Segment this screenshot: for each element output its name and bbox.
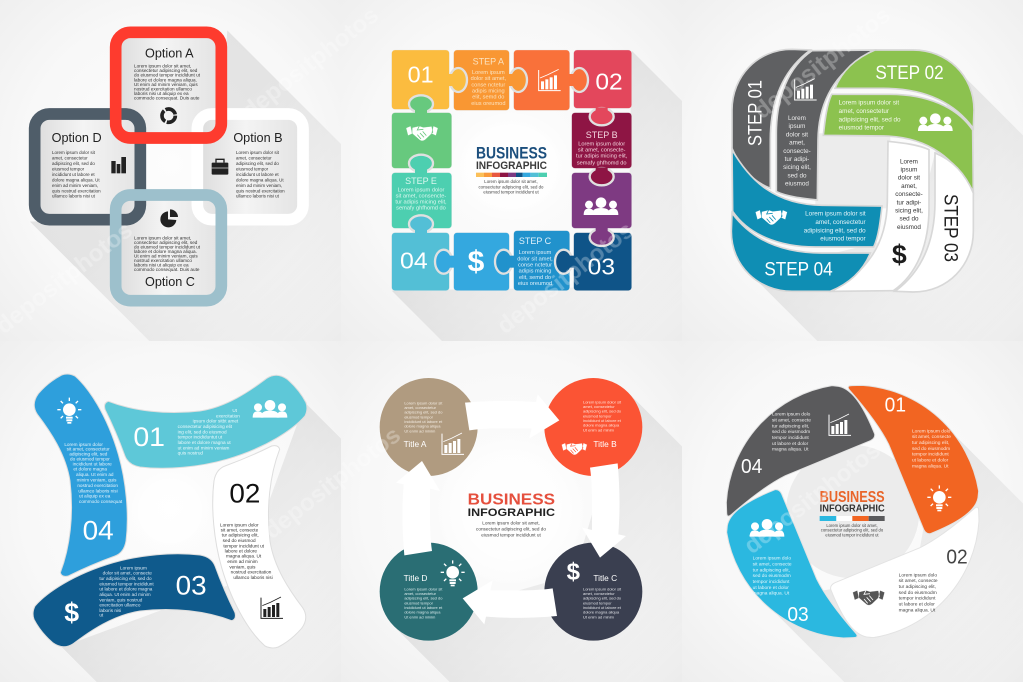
panel: option rings — [28, 26, 341, 341]
text: A: dolore magna aliqua — [404, 424, 441, 429]
center text: eiusmod tempor incididunt ut — [825, 532, 879, 537]
text: arm 01: quis nostrud — [178, 451, 203, 456]
text: blade 04: tur adipiscing elit, — [772, 423, 809, 429]
text: arm 04: ut aliquip ex ea — [79, 494, 111, 499]
text: step 01: dolor sit — [786, 131, 808, 138]
text: arm 03: veniam, quis nostrud — [99, 597, 143, 602]
text: D: incididunt ut labore et — [404, 605, 443, 610]
text: option D: dolore magna aliqua. Ut — [52, 177, 100, 182]
number: 02: 02 — [229, 479, 260, 509]
text: arm 04: commodo consequat — [79, 499, 123, 504]
text: arm 03: laboris nisi — [99, 608, 121, 613]
icon: chart — [795, 79, 817, 100]
step 03 shapes — [832, 141, 973, 292]
text: arm 04: ullamco laboris nisi — [78, 488, 118, 493]
step C: elit, semd do — [519, 275, 551, 281]
text: option B: quis nostrud exercitation — [236, 188, 285, 193]
text: step 01: tur adipi- — [785, 156, 809, 163]
text: blade 01: tur adipiscing elit, — [912, 440, 949, 446]
text: blade 02: ut labore et dolor — [899, 601, 935, 607]
text: option A: Ut enim ad minim veniam, quis — [134, 82, 198, 87]
text: C: eiusmod tempor — [583, 600, 612, 605]
text: option A: consectetur adipiscing elit, sed — [134, 68, 198, 73]
text: B: eiusmod tempor — [583, 413, 612, 418]
text: blade 03: sit amet, consecte — [753, 561, 792, 567]
heading: option A: Option A — [145, 47, 194, 61]
icon: people — [584, 197, 618, 215]
icon: dollar: $ — [64, 598, 79, 628]
icon: handshake — [562, 443, 587, 455]
arrow: A to B — [465, 394, 559, 438]
text: B: adipiscing elit, sed do — [583, 409, 622, 414]
heading: option B: Option B — [233, 131, 283, 145]
card backgrounds — [39, 37, 299, 296]
step C: dolor sit amet, — [517, 256, 553, 262]
icon: bulb — [441, 560, 465, 586]
text: option C: labore et dolore magna aliqua. — [134, 249, 197, 254]
text: D: amet, consectetur — [404, 591, 437, 596]
text: blade 01: ut labore et dolor — [912, 457, 949, 463]
text: blade 04: sed do eiusmodm — [772, 429, 810, 435]
center text: eiusmod tempor incididunt ut — [481, 533, 541, 538]
step A: eius oreumod — [471, 101, 505, 107]
step A: conse nctetur — [471, 82, 505, 88]
text: A: eiusmod tempor — [404, 414, 434, 419]
arrow: C to D — [463, 580, 557, 624]
step 01 shapes — [732, 49, 874, 200]
watermarks: depositphotos — [259, 422, 406, 545]
text: step 03: ipsum — [901, 167, 917, 174]
text: B: amet, consectetur — [583, 404, 615, 409]
step C: eius oreumod — [518, 281, 552, 287]
icon: bulb — [927, 485, 951, 511]
center plate — [815, 133, 890, 208]
text: arm 04: do eiusmod tempor — [70, 456, 110, 461]
text: blade 01: sit amet, consecte — [912, 434, 951, 440]
text: option A: nostrud exercitation ullamco — [134, 86, 192, 91]
text: B: dolore magna aliqua — [583, 423, 620, 428]
blade 02 — [831, 507, 979, 638]
ring: option C — [116, 195, 221, 301]
label: step 04: STEP 04 — [764, 260, 833, 281]
label: step 02: STEP 02 — [875, 63, 944, 84]
text: blade 04: magna aliqua. Ut — [772, 447, 809, 453]
text: D: Lorem ipsum dolor sit — [404, 586, 443, 591]
watermarks: depositphotos — [739, 437, 886, 560]
text: option C: do eiusmod tempor incididunt ut — [134, 244, 201, 249]
icon: handshake — [755, 210, 787, 225]
step B: semafy ghfhomd do — [577, 160, 627, 166]
circle: D — [380, 543, 478, 641]
text: step 03: Lorem — [900, 158, 918, 165]
text: arm 03: aliqua. Ut enim ad minim — [99, 592, 151, 597]
text: arm 04: aliqua. Ut enim ad — [76, 472, 114, 477]
number: 02: 02 — [946, 545, 968, 568]
text: C: incididunt ut labore et — [583, 605, 622, 610]
blade 03 — [727, 490, 857, 638]
title B: Title B — [593, 439, 617, 449]
step E: Lorem ipsum dolor — [398, 188, 445, 194]
text: blade 03: tempor incididunt — [753, 579, 790, 585]
label: step 01: STEP 01 — [745, 80, 766, 146]
icon: growth chart — [539, 69, 561, 91]
step B: sit amet, consecte- — [578, 148, 626, 154]
text: arm 02: tempor incididunt ut — [223, 543, 265, 548]
step A: STEP A — [473, 56, 504, 66]
icon: people — [918, 113, 953, 131]
icon: bars — [111, 157, 126, 173]
center text: Lorem ipsum dolor sit amet, — [482, 521, 540, 526]
text: B: Ut enim ad minim — [583, 427, 615, 432]
step B: STEP B — [586, 130, 618, 140]
text: option B: ullamco laboris nisi ut — [236, 194, 280, 199]
text: step 02: adipisicing elit, sed do — [839, 116, 901, 123]
text: option D: adipiscing elit, sed do — [52, 161, 95, 166]
center title: BUSINESS — [820, 489, 885, 506]
watermarks: depositphotos — [237, 2, 384, 125]
text: option A: commodo consequat. Duis aute — [134, 95, 200, 100]
text: step 03: dolor sit — [898, 175, 920, 182]
text: step 04: eiusmod tempor — [820, 235, 866, 242]
text: option C: laboris nisi ut aliquip ex ea — [134, 263, 189, 268]
center title — [820, 489, 885, 515]
text: C: amet, consectetur — [583, 591, 615, 596]
text: arm 02: labore et dolore — [225, 549, 257, 554]
text: blade 03: tur adipiscing elit, — [753, 567, 790, 573]
center title — [476, 147, 547, 169]
text: arm 03: eiusmod tempor incididunt — [99, 581, 154, 586]
text: blade 03: ut labore et dolor — [753, 585, 789, 591]
text: step 01: ipsum — [789, 123, 805, 130]
icon: people — [750, 519, 784, 537]
text: arm 02: magna aliqua. Ut — [226, 554, 262, 559]
text: arm 02: sed do eiusmod — [223, 538, 256, 543]
watermarks: depositphotos — [492, 217, 639, 340]
text: blade 02: tur adipiscing elit, — [899, 584, 936, 590]
text: arm 02: veniam, quis — [229, 565, 256, 570]
text: arm 04: Lorem ipsum dolor — [64, 442, 103, 447]
number: 03: 03 — [176, 570, 207, 600]
step C: STEP C — [519, 236, 552, 246]
text: option D: incididunt ut labore et — [52, 172, 95, 177]
text: option D: quis nostrud exercitation — [52, 188, 101, 193]
text: arm 03: tur adipisicing elit, sed do — [99, 576, 152, 581]
text: blade 02: tempor incididunt — [899, 596, 936, 602]
text: arm 01: ipsum dolor sitbt amet — [193, 419, 239, 424]
text: step 04: adipisicing elit, sed do — [804, 227, 866, 234]
ring: option A — [116, 32, 221, 138]
circle: A — [380, 378, 478, 476]
text: arm 04: incididunt ut labore — [73, 461, 112, 466]
text: step 01: consecte- — [783, 148, 811, 155]
text: option D: Lorem ipsum dolor sit — [52, 150, 96, 155]
text: blade 02: Lorem ipsum dolo — [899, 572, 937, 578]
center title: BUSINESS — [476, 143, 547, 162]
step C: Lorem ipsum — [519, 250, 552, 256]
text: arm 02: nostrud exercitation — [231, 570, 272, 575]
number: 02: 02 — [595, 68, 623, 94]
arrow: D to A — [396, 461, 440, 555]
text: option D: eiusmod tempor — [52, 166, 85, 171]
panel: swirl square — [730, 48, 1023, 341]
number: 04: 04 — [400, 247, 428, 273]
heading: option C: Option C — [145, 275, 195, 289]
text: arm 04: adipiscing elit, sed — [69, 452, 108, 457]
watermarks — [0, 2, 896, 560]
panel: curved arms — [0, 341, 341, 682]
text: arm 02: tur adipisicing elit, — [222, 533, 259, 538]
center text: consectetur adipiscing elit, sed do — [821, 528, 884, 533]
blade 01 — [848, 385, 979, 534]
text: blade 03: Lorem ipsum dolo — [753, 556, 791, 562]
number: 01: 01 — [885, 394, 906, 417]
step 02 shapes — [823, 50, 974, 192]
number: 04: 04 — [741, 455, 762, 478]
text: step 02: amet, consectetur — [839, 108, 889, 115]
text: step 03: tur adipi- — [897, 199, 921, 206]
text: blade 02: magna aliqua. Ut — [899, 607, 936, 613]
step E: semafy ghfhomd do — [396, 206, 446, 212]
step 04 shapes — [731, 150, 882, 291]
center title — [468, 492, 555, 519]
title D: Title D — [404, 573, 427, 583]
text: arm 03: exercitation ullamco — [99, 603, 141, 608]
step C: adipis micing — [519, 269, 551, 275]
text: arm 03: dolor sit amet, consecte — [103, 571, 152, 576]
center text: Lorem ipsum dolor sit amet, — [484, 179, 538, 184]
text: arm 01: consectetur adipisicing elit — [178, 424, 233, 429]
icon: people — [253, 400, 287, 418]
step C: conse nctetur — [518, 263, 552, 269]
text: blade 04: ut labore et dolor — [772, 441, 809, 447]
text: option A: do eiusmod tempor incididunt ut — [134, 73, 201, 78]
icon: bulb — [57, 398, 81, 424]
text: step 03: amet, — [901, 183, 917, 190]
knob necks — [415, 74, 608, 268]
blade 04 — [726, 386, 875, 516]
text: arm 01: tempor incididuntut ut — [178, 435, 223, 440]
puzzle tiles — [392, 50, 632, 291]
text: arm 03: Lorem ipsum — [120, 565, 147, 570]
step E: sit amet, consencte- — [396, 194, 446, 200]
text: option B: enim ad minim veniam, — [236, 183, 282, 188]
text: blade 01: magna aliqua. Ut — [912, 463, 949, 469]
text: arm 04: sit amet, consectetur — [67, 447, 110, 452]
text: A: amet, consectetur — [404, 405, 437, 410]
text: blade 01: sed do eiusmodm — [912, 446, 950, 452]
circle: C — [544, 543, 642, 641]
text: arm 01: ut enim ad minim veniam — [178, 445, 230, 450]
icon: handshake — [406, 126, 438, 141]
text: B: Lorem ipsum dolor sit — [583, 399, 622, 404]
text: option A: laboris nisi ut aliquip ex ea — [134, 91, 189, 96]
text: arm 01: exercitation — [216, 413, 240, 418]
text: D: adipiscing elit, sed do — [404, 596, 443, 601]
text: blade 03: magna aliqua. Ut — [753, 591, 790, 597]
text: option D: enim ad minim veniam, — [52, 183, 98, 188]
number: 04: 04 — [83, 515, 114, 545]
center text: Lorem ipsum dolor sit amet, — [826, 523, 878, 528]
icon: dollar: $ — [468, 246, 485, 279]
ring: option D — [35, 114, 140, 220]
icon: cycle — [162, 109, 175, 122]
heading: option D: Option D — [52, 131, 102, 145]
step B: tur adipis micing elit, — [576, 154, 628, 160]
colour strip — [476, 173, 547, 177]
text: option B: Lorem ipsum dolor sit — [236, 150, 280, 155]
step A: dolor sit amet, — [471, 76, 507, 82]
text: arm 03: ut — [99, 613, 104, 618]
step E: STEP E — [405, 176, 437, 186]
icon: chart — [442, 433, 464, 454]
text: step 03: consecte- — [895, 191, 923, 198]
icon: chart — [261, 597, 283, 618]
step E: tur adipis micing elit, — [395, 200, 447, 206]
text: arm 03: ut labore et dolore magna — [99, 587, 153, 592]
arrow: B to C — [582, 463, 626, 558]
text: D: dolore magna aliqua — [404, 610, 441, 615]
text: step 02: eiusmod tempor — [839, 124, 884, 131]
number: 03: 03 — [787, 603, 809, 626]
text: option D: ullamco laboris nisi ut — [52, 194, 96, 199]
icon: briefcase — [212, 159, 228, 175]
text: blade 02: sed do eiusmodm — [899, 590, 937, 596]
number: 03: 03 — [588, 253, 615, 279]
text: A: adipiscing elit, sed do — [404, 410, 443, 415]
text: arm 01: Ut — [232, 408, 238, 413]
text: blade 04: tempor incididunt — [772, 435, 809, 441]
text: step 01: eiusmod — [785, 181, 809, 188]
text: option C: nostrud exercitation ullamco — [134, 258, 192, 263]
text: option C: commodo consequat. Duis aute — [134, 267, 200, 272]
text: option D: amet, consectetur — [52, 155, 88, 160]
step A: adipis micing — [472, 88, 505, 94]
center text: consectetur adipiscing elit, sed do — [476, 527, 546, 532]
step B: Lorem ipsum dolor — [578, 142, 625, 148]
text: step 01: sed do — [787, 172, 807, 179]
text: arm 01: labore et dolore magna ut — [178, 440, 231, 445]
text: C: dolore magna aliqua — [583, 610, 620, 615]
step A: Lorem ipsum — [472, 70, 505, 76]
text: blade 03: sed do eiusmodm — [753, 573, 791, 579]
text: blade 01: Lorem ipsum dolo — [912, 428, 951, 434]
center title: INFOGRAPHIC — [476, 160, 547, 172]
text: step 03: sed do — [899, 216, 919, 223]
text: option A: labore et dolore magna aliqua. — [134, 77, 197, 82]
text: arm 02: sit amet, consecte — [221, 527, 259, 532]
watermarks: depositphotos — [749, 2, 896, 125]
text: step 04: Lorem ipsum dolor sit — [805, 211, 866, 218]
text: step 01: Lorem — [788, 115, 806, 122]
icon: chart — [829, 414, 851, 435]
title A: Title A — [404, 439, 427, 449]
center text: consectetur adipiscing elit, sed do — [479, 184, 544, 189]
panel: circles with arrows — [341, 341, 682, 682]
number: 01: 01 — [133, 422, 165, 452]
text: A: incididunt ut labore et — [404, 419, 443, 424]
text: arm 02: ullamco laboris nisi — [233, 575, 273, 580]
icon: dollar: $ — [567, 558, 580, 585]
text: step 01: sicing elit, — [783, 164, 811, 171]
number: 01: 01 — [408, 62, 434, 88]
label: step 03: STEP 03 — [940, 194, 961, 262]
arm 03 — [33, 554, 235, 647]
text: arm 02: enim ad minim — [227, 559, 258, 564]
text: arm 04: et dolore magna — [73, 466, 107, 471]
text: option B: amet, consectetur — [236, 155, 272, 160]
text: option B: adipiscing elit, sed do — [236, 161, 279, 166]
text: arm 02: Lorem ipsum dolor — [220, 522, 259, 527]
text: blade 01: tempor incididunt — [912, 452, 949, 458]
center title: BUSINESS — [468, 492, 555, 509]
center title: INFOGRAPHIC — [820, 504, 885, 515]
text: D: eiusmod tempor — [404, 600, 434, 605]
text: step 03: eiusmod — [897, 224, 921, 231]
arm 01 — [105, 375, 307, 468]
arm 04 — [34, 374, 127, 576]
text: D: Ut enim ad minim — [404, 614, 436, 619]
text: blade 04: sit amet, consecte — [772, 417, 811, 423]
step A: elit, semd do — [472, 95, 504, 101]
circle: B — [544, 378, 642, 476]
text: arm 04: minim veniam, quis — [77, 478, 117, 483]
center title: INFOGRAPHIC — [468, 507, 555, 519]
text: blade 04: Lorem ipsum dolo — [772, 412, 811, 418]
text: C: Ut enim ad minim — [583, 614, 615, 619]
center text: eiusmod tempor incididunt ut — [483, 190, 539, 195]
ring: option B — [197, 114, 303, 220]
text: option B: incididunt ut labore et — [236, 172, 279, 177]
text: step 04: amet, consectetur — [815, 219, 866, 226]
text: step 01: amet, — [789, 140, 805, 147]
text: arm 04: nostrud exercitation — [77, 483, 118, 488]
text: option C: consectetur adipiscing elit, sed — [134, 240, 198, 245]
panel: shutter circle — [682, 341, 1023, 682]
text: step 02: Lorem ipsum dolor sit — [839, 100, 899, 107]
icon: pie chart — [160, 209, 178, 227]
icon: handshake — [853, 590, 885, 605]
panel: puzzle square — [392, 50, 682, 341]
text: option C: Lorem ipsum dolor sit amet, — [134, 235, 191, 240]
text: A: Lorem ipsum dolor sit — [404, 400, 443, 405]
title C: Title C — [593, 573, 617, 583]
text: C: Lorem ipsum dolor sit — [583, 586, 622, 591]
arm 02 — [213, 446, 306, 648]
text: arm 01: ing elit, sed do eiusmod — [178, 429, 227, 434]
icon: dollar: $ — [892, 239, 907, 269]
colour strip — [820, 516, 885, 521]
text: step 03: sicing elit, — [895, 208, 923, 215]
text: option B: eiusmod tempor — [236, 166, 269, 171]
text: blade 02: sit amet, consecte — [899, 578, 938, 584]
text: option C: Ut enim ad minim veniam, quis — [134, 253, 198, 258]
puzzle knobs — [409, 68, 614, 274]
text: option B: dolore magna aliqua. Ut — [236, 177, 284, 182]
text: B: incididunt ut labore et — [583, 418, 622, 423]
text: option A: Lorem ipsum dolor sit amet, — [134, 64, 191, 69]
text: A: Ut enim ad minim — [404, 428, 436, 433]
text: C: adipiscing elit, sed do — [583, 596, 622, 601]
